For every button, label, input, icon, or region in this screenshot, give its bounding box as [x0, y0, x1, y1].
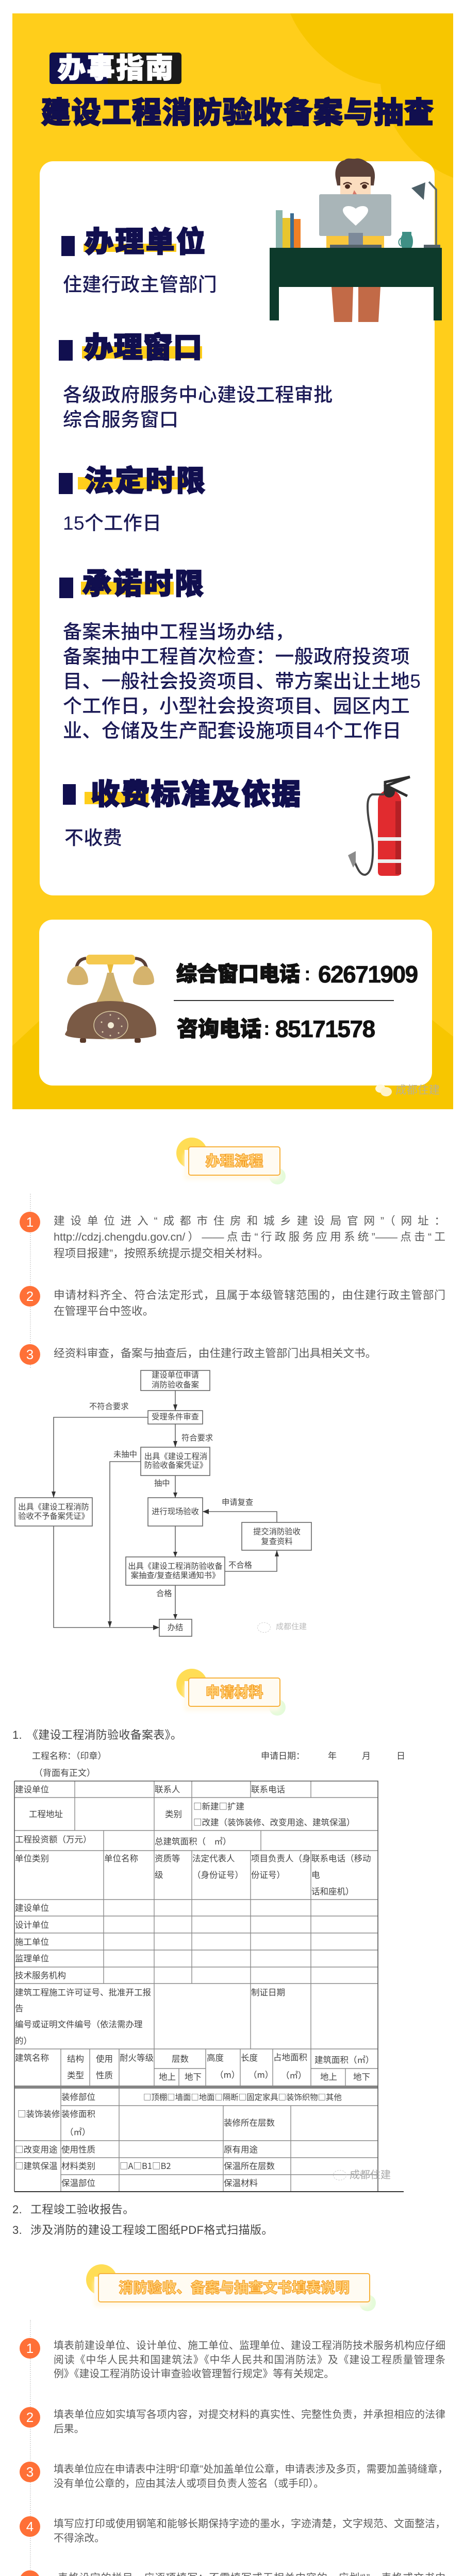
flow chart: 出具《建设工程消防: [18, 1503, 89, 1512]
contact: 综合窗口电话: 62671909: [318, 961, 418, 988]
note 1: 填表前建设单位、设计单位、施工单位、监理单位、建设工程消防技术服务机构应仔细: [54, 2340, 445, 2351]
material 2: 2.: [12, 2203, 22, 2216]
watermark: flow chart: 成都住建: [276, 1622, 307, 1631]
note 3: [20, 2462, 448, 2489]
flow chart: 提交消防验收: [253, 1527, 301, 1536]
form table: （m）: [248, 2068, 273, 2080]
form table: □装饰装修: [18, 2107, 60, 2120]
icon: fire extinguisher: [348, 776, 410, 876]
material 3: 3.: [12, 2224, 22, 2236]
form table: 类型: [67, 2069, 84, 2081]
text: 承诺时限内容: [63, 621, 421, 741]
watermark: header panel: 成都住建: [395, 1084, 440, 1096]
section label: 填表说明: [86, 2264, 376, 2311]
step 1: 1: [26, 1214, 34, 1230]
decorative darker shape: panel bottom: [12, 1020, 453, 1109]
timeline: instruction dots: [30, 2320, 31, 2576]
section label: 填表说明: 消防验收、备案与抽查文书填表说明: [119, 2280, 350, 2296]
form table: 保温部位: [61, 2176, 95, 2189]
form table: 地上: [320, 2070, 337, 2082]
form table: □改建（装饰装修、改变用途、建筑保温）: [193, 1816, 355, 1828]
note 3: 没有单位公章的，应由其法人或项目负责人签名（或手印）。: [54, 2478, 324, 2489]
note 3: 3: [26, 2464, 34, 2480]
form table: 施工单位: [15, 1935, 49, 1947]
badge: 办事指南: 办事指南: [58, 53, 173, 84]
form table: 层数: [172, 2052, 189, 2064]
flow chart: 案抽查/复查结果通知书》: [131, 1571, 220, 1580]
note 4: [20, 2516, 445, 2544]
form table: 单位类别: [15, 1852, 49, 1864]
decorative darker corner shape: top right: [290, 13, 453, 178]
form table: 耐火等级: [120, 2051, 154, 2063]
heading: 法定时限: 法定时限: [85, 465, 205, 497]
flow chart: 出具《建设工程消: [144, 1452, 207, 1461]
form table: 类别: [165, 1807, 182, 1820]
contact: 咨询电话: 咨询电话: [177, 1017, 261, 1041]
contact: 咨询电话: 85171578: [275, 1015, 375, 1042]
section label: 办理流程: [176, 1138, 286, 1184]
form table: 建设单位: [15, 1783, 49, 1795]
form table: 法定代表人: [192, 1852, 235, 1864]
material 3: 涉及消防的建设工程竣工图纸PDF格式扫描版。: [30, 2224, 273, 2236]
text: 承诺时限内容: 备案未抽中工程当场办结，: [63, 621, 294, 642]
form table: □新建□扩建: [193, 1800, 244, 1812]
step 2: 在管理平台中签收。: [54, 1304, 154, 1317]
form table: 联系人: [155, 1783, 180, 1795]
contact: 综合窗口电话: 综合窗口电话: [176, 963, 300, 986]
divider: contact: [174, 1000, 394, 1001]
form table: （㎡）: [281, 2069, 306, 2081]
form table: 总建筑面积（ ㎡）: [155, 1835, 231, 1847]
heading: 办理单位: 办理单位: [85, 226, 205, 258]
text: 承诺时限内容: 业、仓储及生产配套设施项目4个工作日: [63, 720, 402, 741]
form table: 建筑名称: [15, 2051, 49, 2063]
note 4: 不得涂改。: [54, 2533, 105, 2544]
form table: 建筑面积（㎡）: [314, 2053, 374, 2065]
flow chart: 消防验收备案: [152, 1380, 199, 1389]
note 1: 1: [26, 2341, 34, 2356]
form table: 话和座机）: [311, 1885, 354, 1897]
step 1: [20, 1212, 445, 1260]
illustration: person at desk: [270, 159, 442, 322]
flow chart: 办结: [168, 1623, 183, 1632]
form table: 技术服务机构: [15, 1969, 66, 1981]
step 1: http://cdzj.chengdu.gov.cn/）——点击“行政服务应用系统”——点击“工: [54, 1230, 445, 1243]
form table: 使用性质: [61, 2143, 95, 2155]
form table: 性质: [96, 2069, 113, 2081]
form table: 高度: [207, 2051, 224, 2063]
form header: [32, 1749, 405, 1778]
form table: 地下: [185, 2070, 202, 2082]
form table: 告: [15, 2002, 24, 2014]
step 2: 2: [26, 1289, 34, 1304]
panel: contact card: [39, 920, 432, 1086]
note 1: 阅读《中华人民共和国建筑法》《中华人民共和国消防法》及《建设工程质量管理条: [54, 2354, 445, 2366]
form table: 材料类别: [61, 2159, 95, 2172]
form table: （身份证号）: [192, 1868, 243, 1880]
note 4: 4: [26, 2519, 34, 2534]
form table: 地上: [159, 2070, 176, 2082]
text: 承诺时限内容: 个工作日，小型社会投资项目、园区内工: [63, 696, 410, 717]
flow chart: 抽中: [154, 1479, 170, 1488]
heading: 收费标准及依据: 收费标准及依据: [91, 778, 301, 810]
section label: 办理流程: 办理流程: [205, 1153, 263, 1169]
note 1: [20, 2338, 445, 2380]
form table: 建设单位: [15, 1901, 49, 1913]
panel: yellow header background: [12, 13, 453, 1109]
form table: 工程地址: [29, 1807, 63, 1820]
step 1: 建设单位进入“成都市住房和城乡建设局官网”（网址：: [54, 1214, 445, 1227]
form table: 使用: [96, 2052, 113, 2064]
watermark: flow chart: [257, 1622, 307, 1633]
icon: vintage telephone: [65, 955, 156, 1043]
flow chart: 申请复查: [222, 1498, 253, 1507]
form table: 保温材料: [224, 2176, 258, 2189]
flow chart: 合格: [156, 1589, 172, 1598]
title: 建设工程消防验收备案与抽查: [41, 96, 434, 129]
timeline: process dots: [30, 1194, 31, 1368]
contact: 咨询电话: [177, 1015, 375, 1042]
form table: （㎡）: [65, 2125, 91, 2138]
flow chart: 复查资料: [261, 1537, 293, 1546]
form table: 占地面积: [273, 2050, 307, 2063]
text: 收费内容: 不收费: [64, 827, 122, 849]
watermark: table: 成都住建: [350, 2170, 391, 2181]
text: 办理窗口内容: 各级政府服务中心建设工程审批: [63, 384, 333, 405]
flow chart: 验收不予备案凭证》: [18, 1512, 89, 1521]
form table: 结构: [67, 2052, 84, 2064]
step 3: 经资料审查，备案与抽查后，由住建行政主管部门出具相关文书。: [54, 1347, 376, 1360]
step 2: [20, 1286, 445, 1317]
form table: 联系电话: [251, 1783, 285, 1795]
material 1 heading: 《建设工程消防验收备案表》。: [27, 1728, 182, 1741]
form table: 保温所在层数: [224, 2159, 275, 2172]
section label: 申请材料: 申请材料: [205, 1684, 263, 1700]
material 1 heading: 1.: [12, 1728, 22, 1741]
note 2: 后果。: [54, 2424, 84, 2435]
form header: （背面有正文）: [34, 1766, 95, 1778]
form table: [14, 1781, 404, 2192]
form table: 的）: [15, 2034, 32, 2046]
form table: 编号或证明文件编号（依法需办理: [15, 2018, 142, 2030]
form table: 工程投资额（万元）: [15, 1833, 92, 1845]
flow chart: 不合格: [228, 1561, 252, 1570]
step 3: [20, 1344, 376, 1365]
form table: 级: [155, 1868, 163, 1880]
form table: 单位名称: [104, 1852, 138, 1864]
watermark: header panel: [375, 1084, 440, 1096]
contact: 综合窗口电话: [176, 961, 418, 988]
form table: 长度: [241, 2051, 258, 2063]
heading: 承诺时限: 承诺时限: [82, 568, 204, 600]
step 2: 申请材料齐全、符合法定形式，且属于本级管辖范围的，由住建行政主管部门: [54, 1289, 445, 1301]
contact: 咨询电话: :: [263, 1018, 270, 1040]
text: 法定时限内容: 15个工作日: [63, 513, 162, 534]
note 3: 填表单位应在申请表中注明“印章”处加盖单位公章，申请表涉及多页，需要加盖骑缝章，: [54, 2464, 448, 2475]
form table: 电: [311, 1868, 320, 1880]
form table: 联系电话（移动: [311, 1852, 371, 1864]
form table: □改变用途: [15, 2143, 58, 2155]
form table: 装修面积: [61, 2107, 95, 2120]
form table: 资质等: [155, 1852, 180, 1864]
form table: 项目负责人（身: [251, 1852, 310, 1864]
form table: 监理单位: [15, 1952, 49, 1964]
text: 承诺时限内容: 备案抽中工程首次检查：一般政府投资项: [63, 646, 410, 667]
form table: 原有用途: [224, 2143, 258, 2155]
flow chart: 未抽中: [113, 1450, 137, 1459]
flow chart: 出具《建设工程消防验收备: [128, 1562, 223, 1571]
note 1: 例》《建设工程消防设计审查验收管理暂行规定》等有关规定。: [54, 2368, 334, 2380]
material 2: 工程竣工验收报告。: [30, 2203, 135, 2216]
panel: main white card: [40, 161, 435, 895]
form table: □A□B1□B2: [120, 2159, 171, 2172]
form table: 建筑工程施工许可证号、批准开工报: [15, 1986, 151, 1998]
form table: 制证日期: [251, 1986, 285, 1998]
flow chart: [14, 1370, 312, 1637]
flow chart: 符合要求: [181, 1434, 213, 1443]
note 2: 2: [26, 2410, 34, 2425]
text: 办理窗口内容: [63, 384, 333, 430]
form table: 装修部位: [61, 2090, 95, 2103]
note 2: 填表单位应如实填写各项内容，对提交材料的真实性、完整性负责，并承担相应的法律: [54, 2409, 445, 2420]
text: 承诺时限内容: 目、一般社会投资项目、带方案出让土地5: [63, 671, 421, 692]
form table: 设计单位: [15, 1918, 49, 1930]
note 5: [21, 2570, 445, 2576]
contact: 综合窗口电话: :: [304, 963, 311, 985]
text: 办理单位内容: 住建行政主管部门: [63, 274, 217, 295]
form table: □建筑保温: [15, 2159, 58, 2172]
flow chart: 建设单位申请: [152, 1371, 199, 1380]
flow chart: 不符合要求: [89, 1402, 129, 1411]
form table: □顶棚□墙面□地面□隔断□固定家具□装饰织物□其他: [143, 2091, 342, 2103]
note 4: 填写应打印或使用钢笔和能够长期保持字迹的墨水，字迹清楚，文字规范、文面整洁，: [54, 2518, 445, 2530]
section label: 申请材料: [176, 1669, 286, 1716]
flow chart: 受理条件审查: [152, 1413, 199, 1421]
step 1: 程项目报建”，按照系统提示提交相关材料。: [54, 1247, 269, 1260]
note 2: [20, 2407, 445, 2435]
step 3: 3: [26, 1347, 34, 1362]
flow chart: 进行现场验收: [152, 1507, 199, 1516]
flow chart: 防验收备案凭证》: [144, 1461, 207, 1470]
form table: 份证号）: [251, 1868, 285, 1880]
form table: 装修所在层数: [224, 2116, 275, 2128]
text: 办理窗口内容: 综合服务窗口: [63, 409, 178, 430]
form table: 地下: [353, 2070, 370, 2082]
form table: （m）: [215, 2068, 240, 2080]
heading: 办理窗口: 办理窗口: [84, 331, 202, 364]
